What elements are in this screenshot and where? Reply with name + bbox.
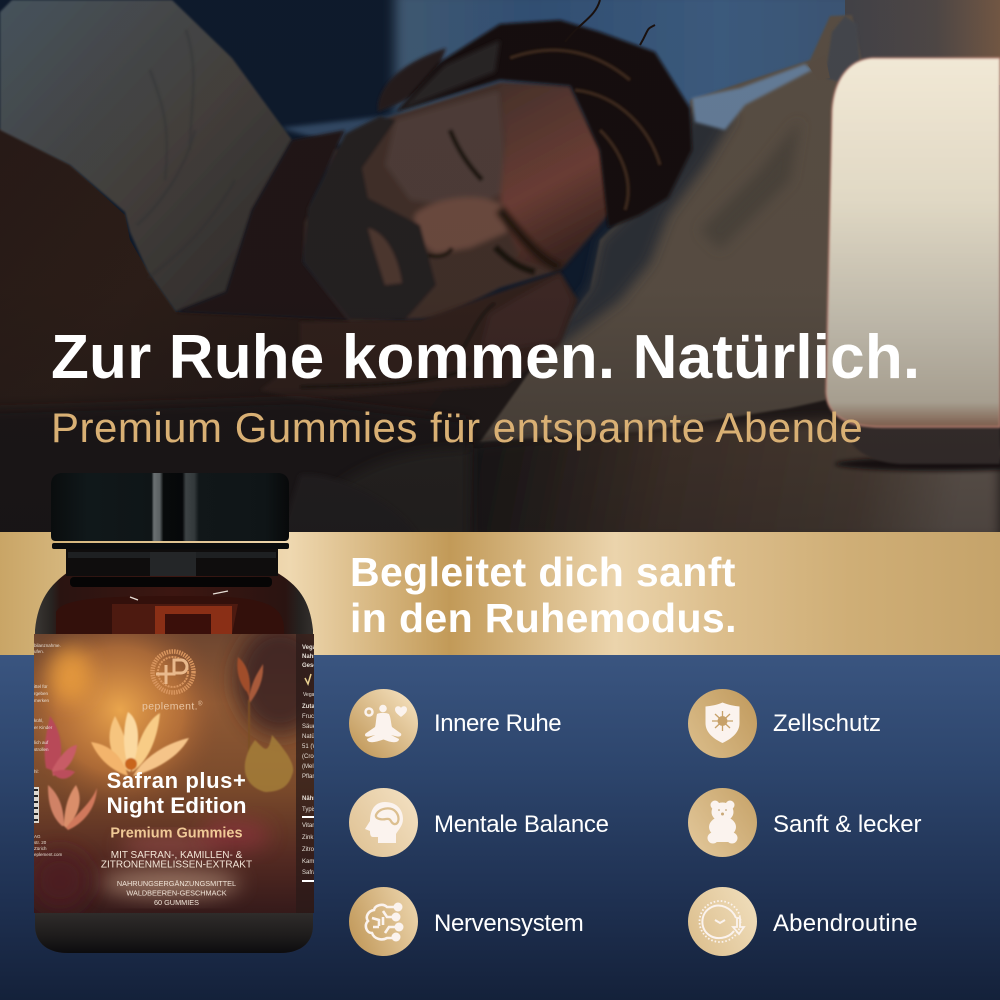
navy panel [0,655,1000,1000]
label right panel: Nahrung [302,654,327,660]
bottle base [35,913,313,953]
left panel micro text: kühl, [34,718,44,723]
feature: Innere Ruhe [349,689,561,758]
lamp base [835,420,1000,471]
icon: brain with neural nodes [349,887,418,956]
head and face [303,82,610,322]
feature: Sanft & lecker [688,788,922,857]
cap [51,473,289,541]
label right panel: Säuerung [302,724,328,730]
label right panel: Geschm [302,663,326,669]
label [30,625,325,914]
product name: Night Edition [107,793,246,818]
t-shirt [0,0,292,312]
label: Nervensystem [434,910,583,937]
label: Innere Ruhe [434,710,561,737]
feature: Nervensystem [349,887,583,956]
label right panel [302,644,314,882]
label right panel: Zink [302,835,314,841]
left panel micro text: AG [34,834,41,839]
label: Zellschutz [773,710,881,737]
icon: clock with circular arrow [688,887,757,956]
product name [107,768,246,818]
neck [176,130,350,320]
left panel micro text: rgeben [34,691,49,696]
forearm and shoulder skin [0,128,480,430]
lamp [826,58,1000,427]
supplement details: NAHRUNGSERGÄNZUNGSMITTEL [117,879,236,888]
band heading: in den Ruhemodus. [350,595,737,641]
left panel micro text: er Kinder [34,725,53,730]
ear [378,48,446,112]
label right panel: Typische [302,807,326,813]
label right panel: Pflanzen [302,774,325,780]
label right panel: Natürlich [302,734,326,740]
label right panel: Vegan [303,692,317,698]
left panel micro text: lich auf [34,740,49,745]
brand name: peplement. [142,700,198,712]
left panel micro text: ittel für [34,684,48,689]
product type: Premium Gummies [110,826,243,842]
left panel micro text: strollen [34,747,49,752]
left panel micro text: ufen. [34,649,44,654]
supplement details [117,879,236,907]
label flowers [45,657,293,830]
blanket [0,400,470,545]
bottle glass [35,545,313,953]
label right panel: Vitamin [302,823,322,829]
subheadline: Premium Gummies für entspannte Abende [51,404,863,451]
feature: Zellschutz [688,689,881,758]
label right panel: Fructose [302,714,326,720]
label right panel: 51 (Was [302,744,324,750]
left panel micro text: merken [34,698,50,703]
product bottle [34,473,314,953]
label right panel: Zitronen [302,847,324,853]
left panel micro text: str. 20 [34,840,47,845]
left panel micro text: eplement.com [34,852,63,857]
body base [0,320,1000,532]
icon: meditating person [349,689,418,758]
hair [396,0,692,228]
icon: head with brain [349,788,418,857]
left panel micro text: hl: [34,769,39,774]
label: Mentale Balance [434,811,609,838]
wall [280,0,1000,145]
band heading [350,549,737,641]
label: Sanft & lecker [773,811,921,838]
brand name: ® [198,700,203,708]
left panel micro text: Zürich [34,846,47,851]
left panel micro text [34,643,63,857]
table [470,420,1000,540]
hand under cheek [260,272,578,400]
label: Abendroutine [773,910,918,937]
pillow [480,15,862,442]
left panel micro text: bilanznahme. [34,643,61,648]
ingredients: ZITRONENMELISSEN-EXTRAKT [101,860,252,870]
feature: Abendroutine [688,887,918,956]
label right panel: (Melissa [302,764,325,770]
ingredients [101,850,252,870]
gold band [0,532,1000,655]
label right panel: Nährwert [302,796,328,802]
label right panel: Safran [302,870,320,876]
label right panel: Zutaten [302,704,324,710]
brand logo [152,652,194,692]
label right panel: Vegan [302,645,320,651]
hero photo: man sleeping beside a lamp [0,0,1000,532]
icon: gummy bear [688,788,757,857]
headline: Zur Ruhe kommen. Natürlich. [51,323,920,392]
supplement details: WALDBEEREN-GESCHMACK [126,888,227,898]
label right panel: (Crocus [302,754,323,760]
supplement details: 60 GUMMIES [154,898,199,907]
band heading: Begleitet dich sanft [350,549,736,595]
feature: Mentale Balance [349,788,609,857]
label right panel: Kamille [302,859,322,865]
icon: shield with cell [688,689,757,758]
ingredients: MIT SAFRAN-, KAMILLEN- & [111,850,243,861]
product name: Safran plus+ [107,768,246,793]
